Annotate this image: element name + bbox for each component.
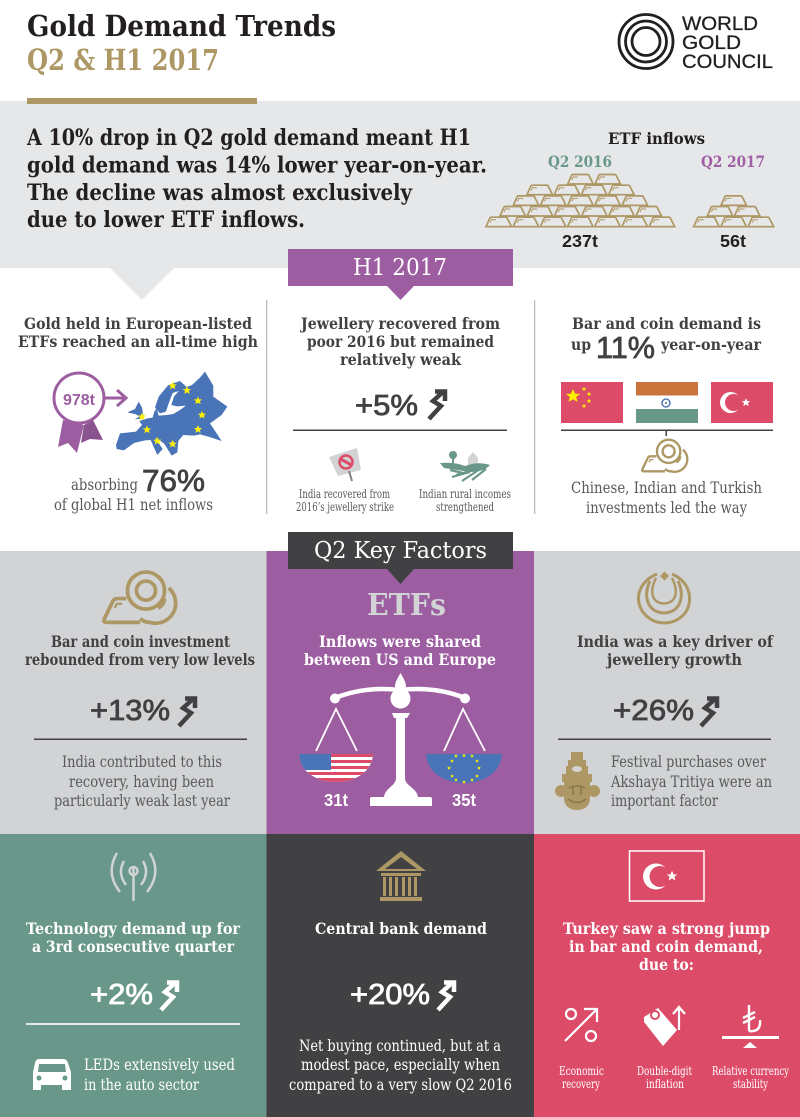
icon: 978t ribbon (54, 373, 126, 453)
icon: US bowl (299, 754, 373, 784)
icon: price tag up (644, 1007, 685, 1046)
panel: Bar and coin: year-on-year (660, 335, 762, 354)
panel: European ETFs (18, 314, 258, 514)
stat: +13%: +13% (90, 695, 170, 727)
panel: Turkey: Economic (559, 1064, 604, 1078)
panel: Turkey: inflation (646, 1077, 684, 1091)
icon: percent up (565, 1009, 597, 1041)
flag: China (561, 382, 623, 423)
banner: H1 2017: H1 2017 (353, 255, 447, 281)
factor: ETFs: between US and Europe (304, 650, 496, 669)
panel: Q2 grey right (534, 551, 800, 834)
icon: protest sign (329, 448, 361, 481)
panel: Jewellery: Jewellery recovered from (299, 314, 501, 333)
summary text: due to lower ETF inflows. (27, 207, 305, 233)
icon: necklace (638, 572, 690, 623)
panel: Turkey: stability (733, 1077, 768, 1091)
panel: Jewellery: 2016’s jewellery strike (296, 500, 394, 514)
panel: European ETFs: absorbing (71, 476, 138, 494)
summary text (26, 125, 487, 233)
factor: India jewellery: jewellery growth (605, 650, 742, 669)
factor: bar and coin investment: Bar and coin investment (51, 632, 231, 651)
title: Q2 & H1 2017 (27, 43, 219, 77)
icon: Turkey flag (630, 851, 704, 901)
panel: technology: Technology demand up for (26, 919, 241, 938)
panel: Jewellery: poor 2016 but remained (307, 332, 494, 351)
panel: European ETFs: ETFs reached an all-time high (18, 332, 258, 351)
factor: ETFs: ETFs (367, 588, 446, 623)
icon: car (33, 1059, 71, 1090)
panel: technology: in the auto sector (84, 1076, 199, 1094)
map: Europe with EU stars (116, 372, 227, 456)
stat: +26%: +26% (613, 695, 694, 727)
icon: bar and coin (642, 440, 687, 472)
icon: farm (440, 451, 490, 481)
logo: World Gold Council: GOLD (682, 33, 741, 54)
panel: technology (0, 834, 267, 1117)
icon: lira balance (722, 1005, 779, 1048)
factor: India jewellery: India was a key driver of (577, 632, 774, 651)
panel: Bar and coin: investments led the way (586, 499, 747, 517)
panel: technology: a 3rd consecutive quarter (32, 937, 235, 956)
factor: India jewellery: Festival purchases over (611, 753, 766, 771)
chart: ETF inflows gold bars (486, 129, 774, 251)
panel: European ETFs: of global H1 net inflows (54, 496, 213, 514)
banner: Q2 Key Factors: Q2 Key Factors (314, 538, 487, 564)
icon: 978t ribbon: 978t (63, 392, 96, 409)
factor: India jewellery: important factor (611, 792, 718, 810)
factor: ETFs (299, 588, 502, 810)
logo: World Gold Council (619, 14, 773, 73)
logo: World Gold Council: WORLD (682, 14, 758, 35)
panel: central bank (266, 834, 534, 1117)
panel: Q2 grey left (0, 551, 267, 834)
panel: central bank: compared to a very slow Q2 2016 (289, 1076, 512, 1094)
panel: Turkey: recovery (562, 1077, 600, 1091)
panel: Q2 purple centre (266, 551, 534, 834)
factor: ETFs: 35t (452, 790, 476, 810)
panel: Turkey: in bar and coin demand, (569, 937, 763, 956)
stat: +5%: +5% (355, 390, 418, 422)
title: Gold Demand Trends (27, 9, 336, 43)
factor: bar and coin investment: rebounded from very low levels (25, 650, 255, 669)
factor: ETFs: Inflows were shared (319, 632, 481, 651)
banner: H1 2017 (288, 249, 513, 300)
panel: Bar and coin: up (571, 335, 591, 354)
panel: central bank: Net buying continued, but at a (299, 1037, 501, 1055)
chart: ETF inflows gold bars: 56t (720, 231, 746, 251)
title (27, 9, 336, 77)
factor: bar and coin investment: particularly weak last year (54, 792, 230, 810)
stat: +2%: +2% (90, 979, 153, 1011)
chart: ETF inflows gold bars: Q2 2017 (701, 152, 765, 171)
icon: EU bowl (426, 754, 502, 784)
chart: ETF inflows gold bars: Q2 2016 (548, 152, 612, 171)
chart: ETF inflows gold bars: 237t (562, 231, 598, 251)
banner: Q2 Key Factors (288, 532, 513, 584)
factor: India jewellery (555, 572, 774, 810)
icon: antenna (112, 853, 155, 901)
summary text: A 10% drop in Q2 gold demand meant H1 (26, 125, 471, 151)
panel: European ETFs: 76% (142, 463, 205, 498)
panel: Turkey: Turkey saw a strong jump (563, 919, 770, 938)
chart: ETF inflows gold bars: ETF inflows (608, 129, 705, 148)
panel: central bank: Central bank demand (315, 919, 487, 938)
icon: bank building (376, 851, 426, 901)
stat: +5% (355, 390, 445, 422)
panel: Jewellery: relatively weak (340, 350, 461, 369)
panel: Jewellery: India recovered from (299, 487, 390, 501)
panel: central bank: modest pace, especially when (301, 1056, 500, 1074)
factor: bar and coin investment: India contributed to this (62, 753, 222, 771)
panel: Turkey: Double-digit (637, 1064, 692, 1078)
stat: +2% (90, 979, 177, 1011)
panel: Jewellery (293, 314, 511, 514)
panel: Bar and coin: 11% (596, 330, 655, 365)
panel: Bar and coin (561, 314, 773, 517)
panel: technology: LEDs extensively used (84, 1056, 235, 1074)
panel: summary (0, 98, 800, 300)
logo: World Gold Council: COUNCIL (682, 52, 773, 73)
stat: +20%: +20% (350, 979, 430, 1011)
flag: Turkey (711, 382, 773, 423)
panel: European ETFs: Gold held in European-listed (24, 314, 252, 333)
panel: Jewellery: Indian rural incomes (419, 487, 511, 501)
panel: Jewellery: strengthened (436, 500, 494, 514)
factor: India jewellery: Akshaya Tritiya were an (610, 773, 772, 791)
panel: Turkey (534, 834, 800, 1117)
panel: Bar and coin: Chinese, Indian and Turkish (571, 479, 762, 497)
factor: ETFs: 31t (324, 790, 348, 810)
icon: deity mask (555, 752, 600, 810)
icon: bar and coin large (104, 572, 176, 623)
panel: Turkey: due to: (639, 955, 694, 974)
summary text: The decline was almost exclusively (27, 180, 413, 206)
icon: balance scale (316, 673, 485, 806)
factor: bar and coin investment: recovery, having been (69, 773, 214, 791)
panel: Bar and coin: Bar and coin demand is (572, 314, 761, 333)
flag: India (636, 382, 698, 423)
factor: bar and coin investment (25, 572, 255, 810)
summary text: gold demand was 14% lower year-on-year. (27, 152, 487, 178)
